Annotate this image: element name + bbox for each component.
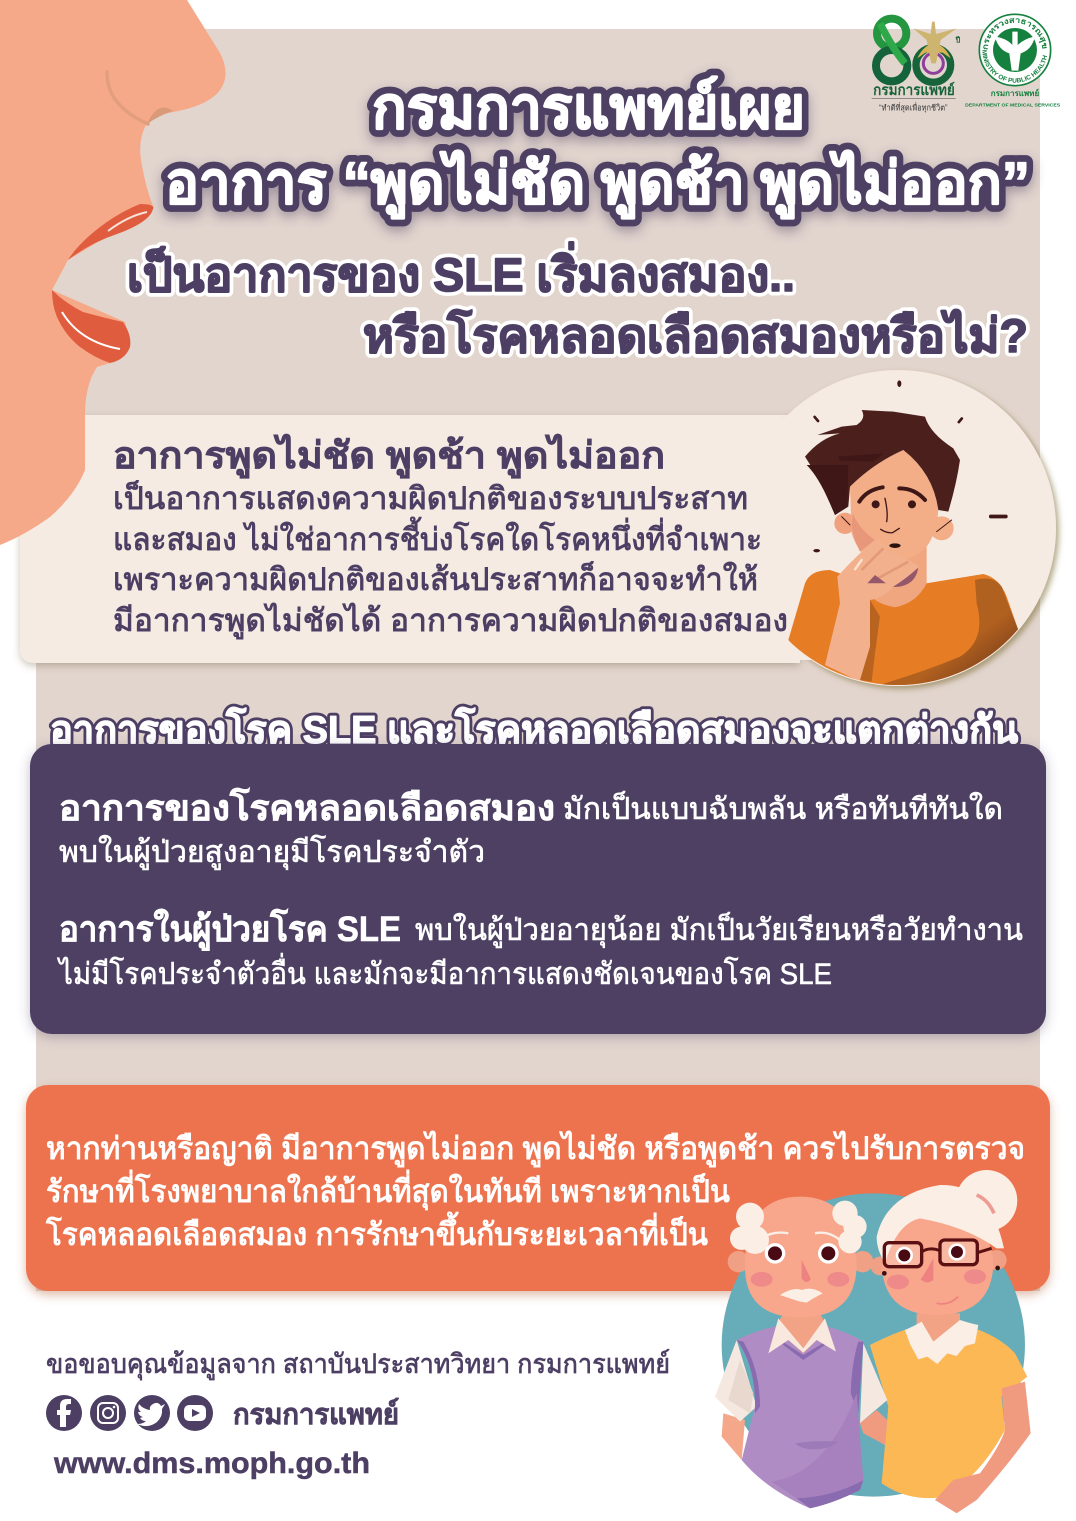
panel: comparison of symptoms — [30, 744, 1046, 1034]
logo: ministry of public health: กระทรวงสาธารณสุข — [983, 18, 1047, 50]
social handle: กรมการแพทย์ — [233, 1397, 399, 1431]
illustration: face profile — [0, 0, 226, 545]
logo: ministry of public health: DEPARTMENT OF MEDICAL SERVICES — [965, 102, 1061, 108]
credit: ขอขอบคุณข้อมูลจาก สถาบันประสาทวิทยา กรมการแพทย์ — [46, 1348, 670, 1381]
logo: ministry of public health: กรมการแพทย์ — [991, 88, 1039, 98]
card body: เพราะความผิดปกติของเส้นประสาทก็อาจจะทำให้ — [113, 561, 758, 597]
card body: และสมอง ไม่ใช่อาการชี้บ่งโรคใดโรคหนึ่งที่จำเพาะ — [113, 517, 762, 557]
card heading: อาการพูดไม่ชัด พูดช้า พูดไม่ออก — [113, 433, 665, 479]
illustration: elderly couple — [700, 1170, 1031, 1513]
logo: 80 years: “ทำดีที่สุดเพื่อทุกชีวิต” — [879, 102, 948, 114]
section heading: อาการของโรค SLE และโรคหลอดเลือดสมองจะแตกต่างกัน — [50, 707, 1018, 752]
SLE symptoms: พบในผู้ป่วยอายุน้อย มักเป็นวัยเรียนหรือวัยทำงาน — [415, 911, 1023, 949]
advice text: โรคหลอดเลือดสมอง การรักษาขึ้นกับระยะเวลาที่เป็น — [45, 1211, 708, 1252]
card body: เป็นอาการแสดงความผิดปกติของระบบประสาท — [113, 480, 748, 516]
icon: youtube — [177, 1395, 213, 1431]
icon: facebook — [46, 1395, 82, 1431]
SLE symptoms: อาการในผู้ป่วยโรค SLE — [59, 908, 401, 951]
page background panel — [36, 29, 1040, 1291]
card text — [113, 433, 788, 639]
advice text: รักษาที่โรงพยาบาลใกล้บ้านที่สุดในทันที เพราะหากเป็น — [46, 1169, 730, 1211]
panel: symptom card — [20, 370, 1056, 686]
logo: 80 years — [872, 19, 961, 114]
stroke symptoms: มักเป็นแบบฉับพลัน หรือทันทีทันใด — [563, 790, 1003, 826]
subtitle: เป็นอาการของ SLE เริ่มลงสมอง.. — [127, 241, 795, 301]
logo: ministry of public health: MINISTRY OF PUBLIC HEALTH — [982, 50, 1047, 83]
title: กรมการแพทย์เผย — [372, 75, 805, 141]
stroke symptoms: อาการของโรคหลอดเลือดสมอง — [59, 787, 555, 828]
advice text: หากท่านหรือญาติ มีอาการพูดไม่ออก พูดไม่ชัด หรือพูดช้า ควรไปรับการตรวจ — [46, 1130, 1025, 1168]
stroke symptoms: พบในผู้ป่วยสูงอายุมีโรคประจำตัว — [59, 834, 485, 871]
icon: twitter — [134, 1395, 170, 1431]
illustration: worried man — [788, 380, 1018, 687]
logo: 80 years: ปี — [955, 36, 961, 45]
icon: instagram — [90, 1395, 126, 1431]
logo: ministry of public health — [965, 14, 1061, 108]
card body: มีอาการพูดไม่ชัดได้ อาการความผิดปกติของสมอง — [113, 603, 788, 639]
logo: 80 years: กรมการแพทย์ — [873, 81, 955, 99]
advice text — [45, 1130, 1025, 1252]
card body — [113, 480, 788, 639]
website: www.dms.moph.go.th — [53, 1447, 370, 1480]
subtitle: หรือโรคหลอดเลือดสมองหรือไม่? — [363, 308, 1028, 362]
panel: advice — [26, 1085, 1050, 1291]
title — [165, 75, 1030, 219]
subtitle — [127, 241, 1028, 362]
title: อาการ “พูดไม่ชัด พูดช้า พูดไม่ออก” — [165, 150, 1030, 219]
stroke symptoms — [59, 787, 1003, 871]
SLE symptoms: ไม่มีโรคประจำตัวอื่น และมักจะมีอาการแสดงชัดเจนของโรค SLE — [57, 953, 832, 991]
SLE symptoms — [57, 908, 1023, 991]
